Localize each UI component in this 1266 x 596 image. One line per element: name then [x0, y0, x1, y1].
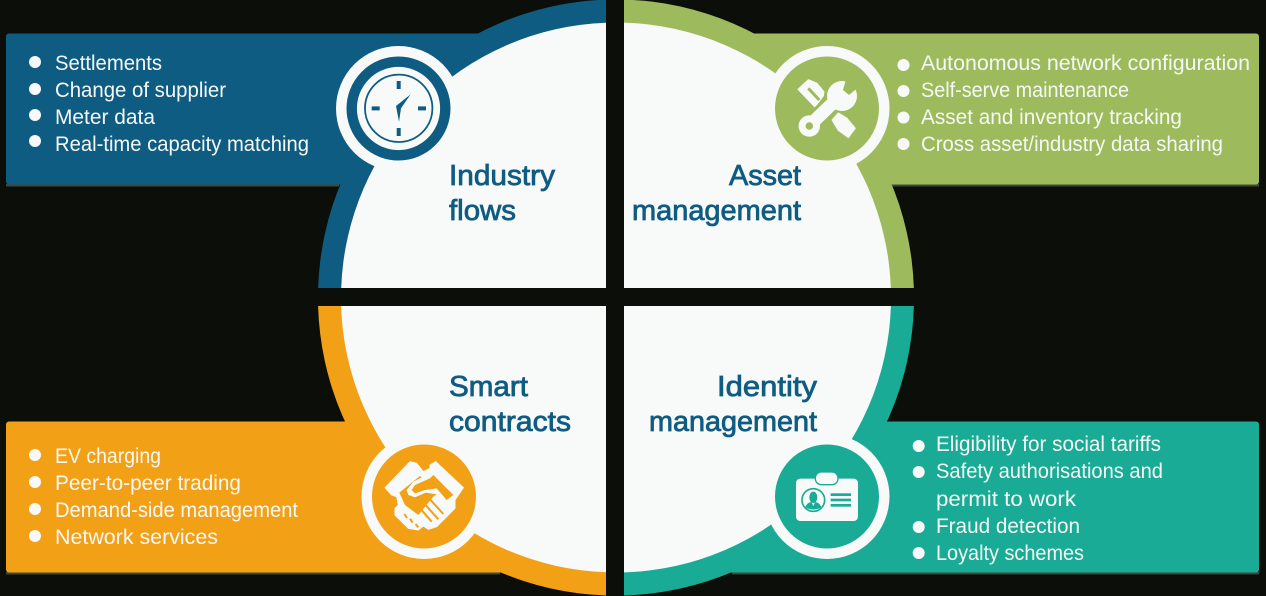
heading: industry flows — [449, 160, 555, 227]
icon: id badge — [796, 472, 858, 521]
list: asset management — [898, 52, 1250, 156]
heading: asset management: management — [632, 195, 801, 227]
list: asset management: Autonomous network configuration — [921, 52, 1250, 75]
icon: wrench and screwdriver — [798, 76, 860, 137]
list: smart contracts: Demand-side management — [55, 499, 298, 522]
heading: identity management: Identity — [717, 371, 818, 403]
heading: smart contracts: Smart — [449, 371, 528, 403]
heading: industry flows: Industry — [449, 160, 555, 192]
list: identity management: Eligibility for social tariffs — [936, 433, 1161, 456]
heading: identity management: management — [649, 406, 817, 438]
icon: handshake — [385, 462, 463, 530]
list: industry flows: Settlements — [55, 52, 162, 75]
heading: industry flows: flows — [449, 195, 516, 227]
heading: asset management: Asset — [729, 160, 801, 192]
panel: smart contracts — [6, 306, 606, 596]
list: industry flows — [29, 52, 309, 156]
list: industry flows: Meter data — [55, 106, 155, 129]
heading: identity management — [649, 371, 818, 438]
list: smart contracts: Network services — [55, 526, 218, 549]
list: smart contracts — [29, 445, 298, 549]
panel: asset management — [624, 0, 1259, 288]
list: industry flows: Change of supplier — [55, 79, 226, 102]
heading: smart contracts: contracts — [449, 406, 571, 438]
list: identity management: Safety authorisations and — [936, 460, 1163, 483]
list: identity management: Loyalty schemes — [936, 542, 1084, 565]
panel: industry flows — [6, 0, 606, 288]
list: smart contracts: EV charging — [55, 445, 161, 468]
heading: asset management — [632, 160, 801, 227]
list: asset management: Cross asset/industry data sharing — [921, 133, 1223, 156]
panel: identity management — [624, 306, 1259, 596]
list: identity management: Fraud detection — [936, 515, 1080, 538]
list: identity management — [913, 433, 1163, 565]
list: identity management: permit to work — [936, 488, 1077, 511]
heading: smart contracts — [449, 371, 571, 438]
list: asset management: Asset and inventory tracking — [921, 106, 1182, 129]
list: smart contracts: Peer-to-peer trading — [55, 472, 241, 495]
list: asset management: Self-serve maintenance — [921, 79, 1129, 102]
icon: clock — [352, 62, 445, 155]
list: industry flows: Real-time capacity matching — [55, 133, 309, 156]
